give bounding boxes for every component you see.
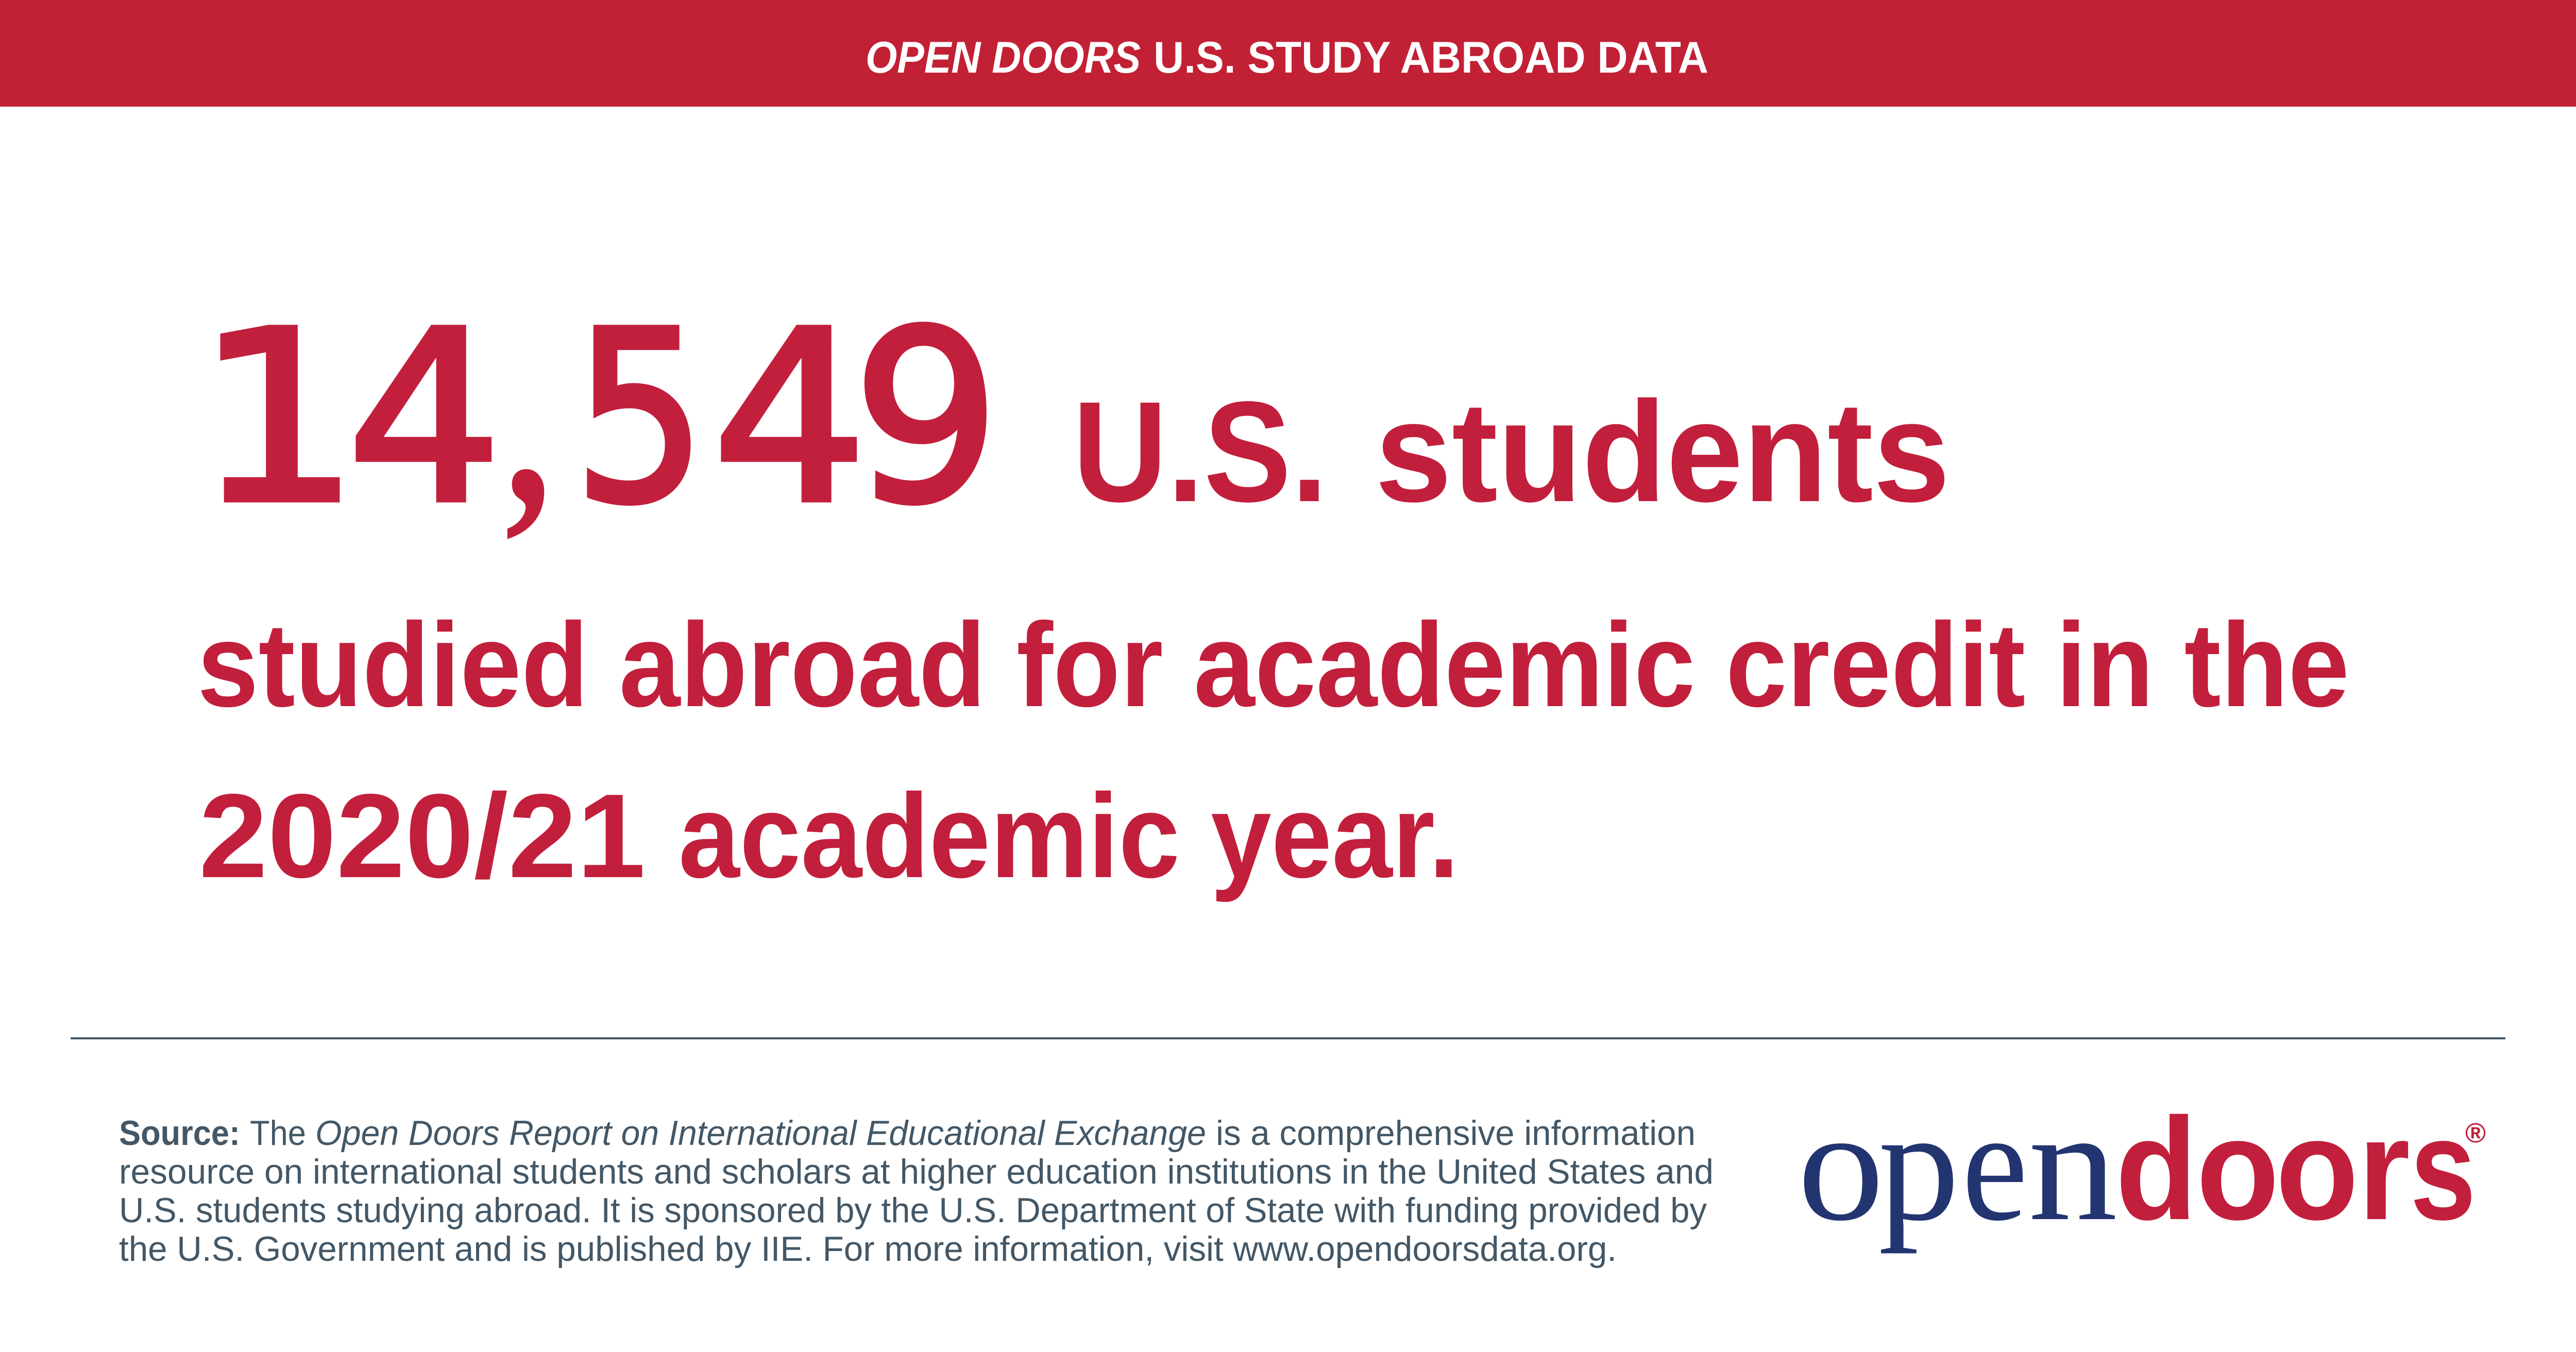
logo: opendoors: d bbox=[2115, 1088, 2197, 1250]
headline line 3: year. bbox=[1211, 769, 1459, 903]
big number bbox=[195, 281, 1000, 556]
big number: , bbox=[505, 297, 551, 554]
logo: opendoors: n bbox=[2028, 1076, 2117, 1254]
header title: U.S. STUDY ABROAD DATA bbox=[1154, 33, 1708, 82]
big number: 5 bbox=[573, 281, 706, 556]
headline line 1: U.S. bbox=[1073, 371, 1328, 532]
logo: opendoors: o bbox=[2196, 1088, 2279, 1250]
source text: is a comprehensive information bbox=[1216, 1114, 1696, 1153]
logo: opendoors: p bbox=[1878, 1076, 1959, 1254]
header title bbox=[866, 33, 1708, 82]
headline line 1: students bbox=[1375, 371, 1950, 532]
logo: opendoors: r bbox=[2358, 1088, 2410, 1250]
big number: 4 bbox=[712, 281, 868, 556]
header banner bbox=[0, 0, 2576, 107]
headline line 3 bbox=[199, 769, 1459, 903]
logo: opendoors: e bbox=[1962, 1076, 2028, 1254]
logo: opendoors: s bbox=[2410, 1088, 2476, 1250]
source text: resource on international students and scholars at higher education institutions in the United States and bbox=[119, 1152, 1714, 1191]
logo: opendoors bbox=[1798, 1076, 2486, 1254]
headline statistic bbox=[195, 281, 2349, 903]
header title: OPEN DOORS bbox=[866, 33, 1141, 82]
logo: opendoors: o bbox=[1798, 1076, 1884, 1254]
headline line 2: studied abroad for academic credit in the bbox=[197, 598, 2349, 732]
source text: the U.S. Government and is published by IIE. For more information, visit www.opendoorsdata.org. bbox=[119, 1229, 1617, 1269]
headline line 3: 2020/21 bbox=[199, 769, 646, 903]
big number: 1 bbox=[195, 281, 361, 556]
headline line 3: academic bbox=[679, 769, 1180, 903]
big number: 9 bbox=[853, 281, 1000, 556]
source text: Open Doors Report on International Educational Exchange bbox=[315, 1114, 1206, 1153]
source text bbox=[119, 1114, 1714, 1269]
source text: Source: bbox=[119, 1114, 240, 1153]
source text: The bbox=[250, 1114, 306, 1153]
source text: U.S. students studying abroad. It is sponsored by the U.S. Department of State with funding provided by bbox=[119, 1191, 1707, 1230]
headline line 1 bbox=[1073, 371, 1950, 532]
big number: 4 bbox=[347, 281, 502, 556]
logo: opendoors: ® bbox=[2465, 1118, 2486, 1149]
logo: opendoors: o bbox=[2276, 1088, 2359, 1250]
